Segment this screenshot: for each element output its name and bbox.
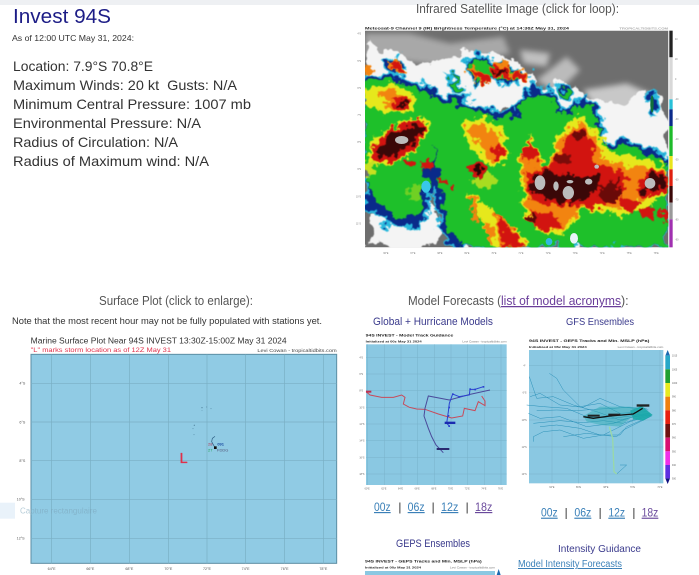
heading: global + hurricane models: Global + Hurricane Models	[373, 316, 493, 328]
satellite axis labels: 67°E	[410, 253, 416, 255]
chart: GEPS ensemble tracks (cropped): Initialized at 00z May 31 2024	[365, 565, 422, 569]
chart: GEPS ensemble tracks (cropped): Levi Cowan - tropicaltidbits.com	[450, 566, 495, 569]
chart: marine surface plot: 10°S	[17, 498, 25, 502]
southward green track	[609, 427, 617, 474]
green convective mass	[365, 61, 668, 247]
panel: storm summary	[12, 6, 251, 169]
chart: marine surface plot: "L" marks storm location as of 12Z May 31	[31, 348, 172, 354]
storm details: Minimum Central Pressure: 1007 mb	[13, 96, 251, 112]
islands	[192, 406, 212, 435]
screen capture ghost tooltip: Capture rectangulaire	[20, 507, 97, 516]
panel: surface plot	[0, 294, 337, 571]
storm details: Environmental Pressure: N/A	[13, 115, 202, 131]
chart: marine surface plot: 6°S	[19, 420, 26, 424]
satellite axis labels: -40	[675, 139, 679, 141]
links: 00z 06z 12z 18z: 18z	[475, 501, 492, 514]
chart: GEPS ensemble tracks (cropped): 94S INVEST - GEPS Tracks and Min. MSLP (hPa)	[365, 560, 483, 564]
chart: GFS ensemble tracks: 94S INVEST - GEFS Tracks and Min. MSLP (hPa)	[529, 339, 650, 343]
station observation: 27	[208, 448, 213, 453]
link: model intensity forecasts: Model Intensity Forecasts	[518, 559, 622, 570]
chart: global + hurricane model tracks: Initialized at 00z May 31 2024	[366, 339, 422, 343]
satellite axis labels: 74°E	[600, 253, 605, 255]
chart: global + hurricane model tracks: 10°S	[359, 407, 365, 409]
links: 00z 06z 12z 18z: |	[432, 501, 435, 514]
screen capture ghost tooltip	[0, 503, 97, 519]
panel: model forecasts heading: Model Forecasts (	[408, 294, 502, 308]
chart: marine surface plot: 72°E	[203, 567, 212, 571]
links: 00z 06z 12z 18z: |	[466, 501, 469, 514]
station observation: FDDG	[217, 448, 228, 453]
heading: GEPS ensembles: GEPS Ensembles	[396, 538, 470, 550]
colour bar labels: 940	[672, 465, 677, 467]
chart: GFS ensemble tracks: 64°E	[549, 487, 555, 489]
satellite axis labels: 8°S	[357, 142, 362, 144]
chart: global + hurricane model tracks: 64°E	[398, 488, 404, 490]
dark core	[377, 68, 667, 225]
station observation: 28	[208, 441, 213, 446]
colour bar labels: 990	[672, 397, 677, 399]
cold cloud blue edge	[365, 57, 668, 247]
chart: global + hurricane model tracks: 66°E	[415, 488, 420, 490]
chart: marine surface plot: 70°E	[164, 567, 173, 571]
satellite axis labels: 10°S	[356, 196, 362, 198]
satellite axis labels: -80	[675, 220, 679, 222]
chart: global + hurricane model tracks: 72°E	[465, 488, 470, 490]
heading: intensity guidance: Intensity Guidance	[558, 543, 641, 555]
links: 00z 06z 12z 18z: 12z	[441, 501, 458, 514]
links: 00z 06z 12z 18z: |	[565, 507, 568, 520]
chart: marine surface plot: 76°E	[281, 567, 289, 571]
links: 00z 06z 12z 18z: |	[398, 501, 401, 514]
yellow band	[363, 82, 668, 247]
chart: infrared satellite image: TROPICALTIDBITS.COM	[619, 26, 669, 30]
links: 00z 06z 12z 18z: 12z	[608, 507, 625, 520]
heading: surface plot: Surface Plot (click to enlarge):	[99, 294, 253, 308]
colour bar labels: 970	[672, 424, 677, 426]
chart: infrared satellite image	[356, 26, 679, 255]
ensemble tracks	[527, 373, 652, 474]
track points	[448, 386, 484, 427]
panel: model forecasts heading	[408, 294, 629, 308]
colour bar labels: 950	[672, 451, 677, 453]
storm details	[13, 58, 251, 169]
cyan blobs	[421, 95, 654, 245]
chart: marine surface plot: 12°S	[17, 537, 25, 541]
chart: global + hurricane model tracks: 8°S	[359, 391, 364, 393]
colour bar labels: 960	[672, 438, 677, 440]
satellite axis labels: 0	[675, 79, 677, 81]
chart: global + hurricane model tracks: 76°E	[498, 488, 504, 490]
satellite axis labels: 4°S	[357, 34, 362, 36]
chart: GFS ensemble tracks: 72°E	[657, 487, 663, 489]
chart: global + hurricane model tracks: 4°S	[359, 357, 364, 359]
chart: marine surface plot: Marine Surface Plot Near 94S INVEST 13:30Z-15:00Z May 31 2024	[31, 336, 287, 345]
satellite axis labels: 6°S	[357, 88, 362, 90]
storm details: Radius of Maximum wind: N/A	[13, 153, 210, 169]
satellite axis labels: 73°E	[573, 253, 578, 255]
link: list of model acronyms: list of model acronyms	[501, 294, 621, 308]
track end labels	[366, 391, 455, 450]
chart: marine surface plot	[0, 336, 338, 571]
station observation: 091	[217, 441, 225, 446]
chart: GFS ensemble tracks: 68°E	[603, 487, 609, 489]
purple track	[424, 390, 490, 453]
heading: GFS ensembles: GFS Ensembles	[566, 316, 634, 328]
chart: global + hurricane model tracks: 94S INVEST - Model Track Guidance	[366, 333, 453, 337]
satellite axis labels: 20	[675, 59, 678, 61]
satellite axis labels: 71°E	[518, 253, 524, 255]
chart: GFS ensemble tracks: Initialized at 06z May 31 2024	[529, 345, 587, 349]
satellite axis labels: 9°S	[357, 169, 362, 171]
links: 00z 06z 12z 18z: |	[599, 507, 602, 520]
links: 00z 06z 12z 18z: 00z	[541, 507, 558, 520]
chart: global + hurricane model tracks: 14°S	[359, 441, 365, 443]
colour bar labels	[672, 356, 678, 481]
chart: marine surface plot: 66°E	[86, 567, 95, 571]
satellite axis labels: 40	[675, 39, 678, 41]
chart: marine surface plot: Levi Cowan - tropicaltidbits.com	[257, 348, 337, 353]
note about stations: Note that the most recent hour may not be fully populated with stations yet.	[12, 316, 322, 327]
ensemble mean track	[583, 408, 643, 418]
chart: global + hurricane model tracks: 68°E	[431, 488, 437, 490]
links: 00z 06z 12z 18z: |	[632, 507, 635, 520]
chart: GFS ensemble tracks: Levi Cowan - tropicaltidbits.com	[618, 346, 663, 349]
satellite axis labels: 68°E	[437, 253, 443, 255]
satellite axis labels: -50	[675, 160, 679, 162]
storm details: Radius of Circulation: N/A	[13, 134, 179, 150]
storm location marker: L	[180, 451, 188, 467]
dense ensemble cluster	[583, 406, 653, 427]
chart: global + hurricane model tracks: 62°E	[381, 488, 387, 490]
chart: GFS ensemble tracks: 10°S	[522, 420, 527, 422]
satellite axis labels: 7°S	[357, 115, 362, 117]
chart: GFS ensemble tracks: 66°E	[576, 487, 582, 489]
links: 00z 06z 12z 18z	[374, 501, 492, 514]
title: Invest 94S: Invest 94S	[13, 6, 111, 28]
colour bar labels: 1015	[672, 356, 678, 358]
satellite axis labels: 69°E	[464, 253, 470, 255]
chart: GFS ensemble tracks	[522, 339, 678, 520]
station observation	[208, 436, 228, 453]
satellite axis labels: 5°S	[357, 61, 362, 63]
satellite axis labels: -90	[675, 240, 679, 242]
chart: GFS ensemble tracks: 4°	[523, 366, 526, 368]
chart: global + hurricane model tracks: Levi Cowan - tropicaltidbits.com	[462, 340, 507, 343]
chart: global + hurricane model tracks: 18°S	[359, 474, 365, 476]
chart: global + hurricane model tracks: 12°S	[359, 424, 365, 426]
satellite axis labels	[356, 34, 679, 255]
satellite axis labels: 66°E	[383, 253, 389, 255]
satellite axis labels: -70	[675, 200, 679, 202]
chart: marine surface plot: 64°E	[48, 567, 56, 571]
chart: GEPS ensemble tracks (cropped)	[365, 560, 501, 575]
chart: marine surface plot: 68°E	[125, 567, 134, 571]
top browser strip	[0, 0, 699, 5]
orange band	[365, 59, 667, 247]
storm details: Location: 7.9°S 70.8°E	[13, 58, 153, 74]
panel: model forecasts heading: ):	[621, 294, 629, 308]
colour bar labels: 930	[672, 479, 677, 481]
chart: GFS ensemble tracks: 70°E	[630, 487, 636, 489]
chart: GFS ensemble tracks: 6°S	[523, 393, 527, 395]
satellite axis labels: 70°E	[491, 253, 497, 255]
chart: global + hurricane model tracks	[359, 333, 507, 514]
grey overshooting tops	[395, 136, 655, 199]
chart: marine surface plot: 78°E	[319, 567, 328, 571]
red track	[366, 392, 485, 418]
red core	[371, 61, 668, 247]
links: 00z 06z 12z 18z: 00z	[374, 501, 391, 514]
chart: GFS ensemble tracks: 12°S	[522, 447, 527, 449]
chart: marine surface plot: 4°S	[19, 382, 26, 386]
heading: infrared satellite image: Infrared Satellite Image (click for loop):	[416, 2, 619, 16]
chart: marine surface plot: 8°S	[19, 459, 26, 463]
links: 00z 06z 12z 18z: 06z	[574, 507, 591, 520]
satellite axis labels: -20	[675, 99, 679, 101]
satellite axis labels: -30	[675, 119, 679, 121]
chart: marine surface plot: 74°E	[242, 567, 250, 571]
satellite colour bar	[669, 31, 673, 247]
mean track labels	[588, 404, 649, 417]
links: 00z 06z 12z 18z	[541, 507, 658, 520]
chart: GFS ensemble tracks: 14°S	[522, 474, 527, 476]
colour bar labels: 1000	[672, 383, 678, 385]
satellite axis labels: -60	[675, 180, 679, 182]
pressure colour bar	[665, 350, 670, 484]
satellite axis labels: 75°E	[627, 253, 632, 255]
links: 00z 06z 12z 18z: 18z	[642, 507, 658, 520]
satellite axis labels: 11°S	[356, 223, 361, 225]
blue track	[447, 387, 483, 426]
chart: global + hurricane model tracks: 16°S	[359, 457, 365, 459]
colour bar labels: 1005	[672, 369, 678, 371]
chart: global + hurricane model tracks: 60°E	[365, 488, 370, 490]
links: 00z 06z 12z 18z: 06z	[408, 501, 425, 514]
satellite axis labels: 76°E	[654, 253, 659, 255]
chart: infrared satellite image: Meteosat-9 Channel 9 (IR) Brightness Temperature (°C) at 14:36Z May 31, 2024	[365, 26, 569, 30]
storm details: Maximum Winds: 20 kt Gusts: N/A	[13, 77, 238, 93]
chart: global + hurricane model tracks: 70°E	[448, 488, 454, 490]
chart: global + hurricane model tracks: 6°S	[359, 374, 364, 376]
satellite axis labels: 72°E	[546, 253, 551, 255]
timestamp: As of 12:00 UTC May 31, 2024:	[12, 33, 134, 43]
colour bar labels: 980	[672, 410, 677, 412]
chart: global + hurricane model tracks: 74°E	[481, 488, 487, 490]
